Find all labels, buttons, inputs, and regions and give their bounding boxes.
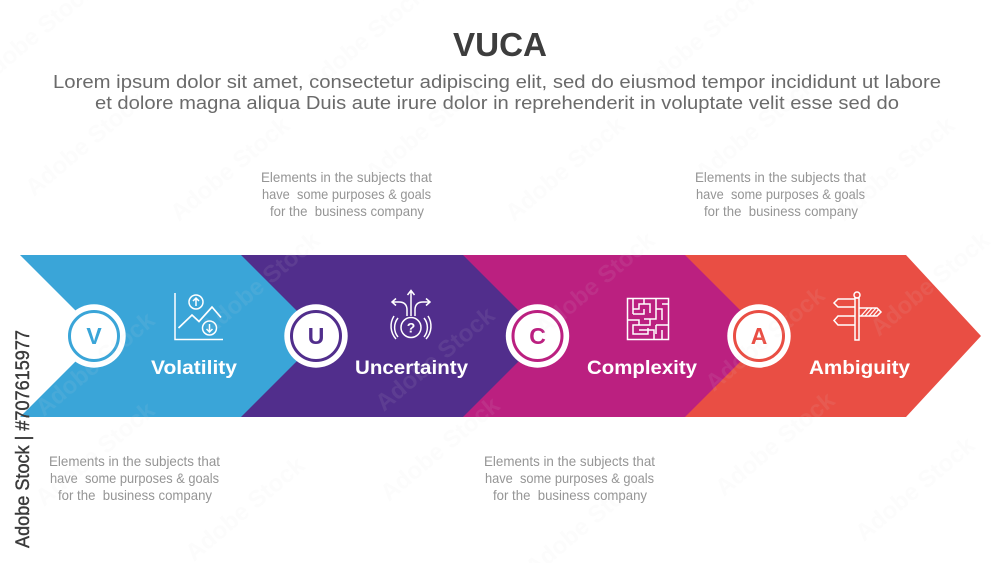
watermark pattern: Adobe Stock	[530, 226, 661, 342]
label: Uncertainty: Uncertainty	[355, 357, 468, 379]
vertical stock credit: Adobe Stock | #707615977	[13, 330, 34, 548]
text block: ambiguity description: Elements in the subjects that	[695, 169, 866, 185]
text block: volatility description	[49, 453, 220, 503]
text block: uncertainty description: have some purposes & goals	[262, 186, 431, 202]
panel: volatility arrow segment	[20, 255, 322, 417]
watermark pattern: Adobe Stock	[360, 71, 491, 187]
watermark pattern: Adobe Stock	[30, 306, 161, 422]
icon: uncertainty arrows and question mark	[391, 290, 431, 339]
watermark pattern: Adobe Stock	[375, 391, 506, 507]
title: VUCA	[453, 26, 547, 63]
label: Ambiguity: Ambiguity	[809, 357, 910, 379]
label: Complexity: Complexity	[587, 357, 697, 379]
text block: complexity description: for the business company	[493, 487, 647, 503]
text block: ambiguity description: for the business company	[704, 203, 858, 219]
text block: uncertainty description: for the business company	[270, 203, 424, 219]
watermark pattern: Adobe Stock	[865, 226, 996, 342]
watermark pattern: Adobe Stock	[370, 301, 501, 417]
subtitle text block: Lorem ipsum dolor sit amet, consectetur adipiscing elit, sed do eiusmod tempor incididunt ut labore	[53, 71, 941, 92]
badge: A	[727, 304, 791, 368]
panel: complexity arrow segment	[463, 255, 766, 417]
badge: U: U	[308, 323, 324, 349]
badge: U	[284, 304, 348, 368]
panel: uncertainty arrow segment	[241, 255, 544, 417]
watermark pattern: Adobe Stock	[710, 386, 841, 502]
text block: uncertainty description: Elements in the subjects that	[261, 169, 432, 185]
watermark pattern: Adobe Stock	[850, 431, 981, 547]
watermark pattern: Adobe Stock	[500, 111, 631, 227]
watermark pattern: Adobe Stock	[165, 111, 296, 227]
watermark pattern: Adobe Stock	[690, 71, 821, 187]
subtitle text block: et dolore magna aliqua Duis aute irure dolor in reprehenderit in voluptate velit esse sed do	[95, 92, 899, 113]
text block: volatility description: have some purposes & goals	[50, 470, 219, 486]
badge: A: A	[751, 323, 767, 349]
watermark pattern: Adobe Stock	[30, 396, 161, 512]
watermark pattern: Adobe Stock	[830, 111, 961, 227]
text block: complexity description: Elements in the subjects that	[484, 453, 655, 469]
text block: uncertainty description	[261, 169, 432, 219]
icon: uncertainty arrows and question mark: ?	[407, 320, 415, 336]
badge: C	[506, 304, 569, 368]
label: Volatility: Volatility	[151, 357, 237, 379]
watermark pattern: Adobe Stock	[195, 226, 326, 342]
subtitle text block	[53, 71, 941, 113]
icon: complexity maze	[628, 298, 668, 340]
text block: complexity description: have some purposes & goals	[485, 470, 654, 486]
text block: ambiguity description: have some purposes & goals	[696, 186, 865, 202]
panel: ambiguity arrow segment	[685, 255, 981, 417]
icon: volatility chart	[175, 293, 223, 340]
badge: V: V	[86, 323, 102, 349]
text block: complexity description	[484, 453, 655, 503]
text block: ambiguity description	[695, 169, 866, 219]
watermark pattern: Adobe Stock	[700, 281, 831, 397]
text block: volatility description: Elements in the subjects that	[49, 453, 220, 469]
badge: V	[62, 304, 126, 368]
icon: ambiguity signpost	[834, 292, 881, 340]
text block: volatility description: for the business company	[58, 487, 212, 503]
watermark pattern: Adobe Stock	[20, 86, 151, 202]
badge: C: C	[529, 323, 546, 349]
